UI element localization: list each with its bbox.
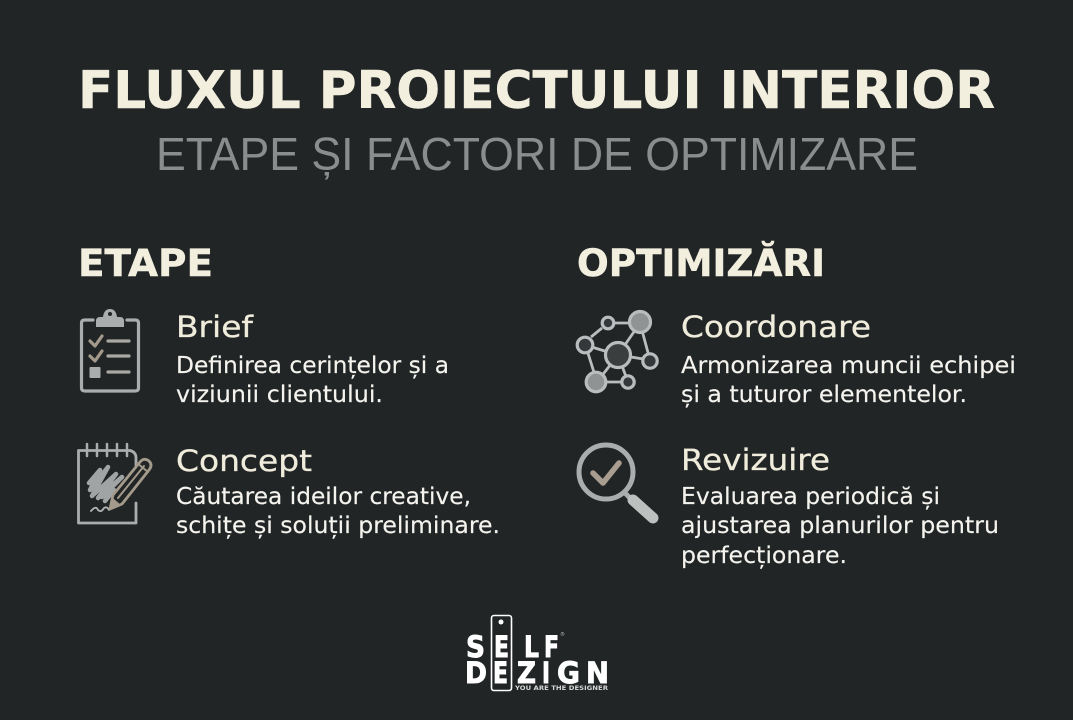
panel: optimizari [577, 241, 1016, 569]
logo: self dezign: E [493, 656, 508, 690]
text: brief description: Definirea cerințelor și a [176, 353, 449, 379]
logo: self dezign: I [542, 656, 550, 690]
logo: self dezign: Z [517, 656, 536, 690]
logo: self dezign: N [586, 656, 609, 690]
logo: self dezign: S [466, 630, 485, 664]
text: revizuire description: Evaluarea periodică și [681, 484, 940, 510]
icon: clipboard checklist [82, 309, 138, 391]
logo: self dezign [465, 616, 609, 692]
title: FLUXUL PROIECTULUI INTERIOR [78, 61, 995, 121]
text: coordonare description [681, 353, 1016, 408]
text: revizuire description: ajustarea planurilor pentru [681, 513, 999, 539]
logo: self dezign: E [494, 630, 509, 664]
panel: etape [78, 242, 500, 539]
logo: self dezign: ® [560, 631, 565, 638]
text: coordonare description: și a tuturor elementelor. [681, 382, 967, 408]
subtitle: ETAPE ȘI FACTORI DE OPTIMIZARE [156, 128, 918, 180]
heading: brief: Brief [176, 310, 254, 344]
text: revizuire description: perfecționare. [681, 543, 847, 569]
logo: self dezign: L [524, 630, 539, 664]
icon: network [577, 312, 657, 392]
text: brief description [176, 353, 449, 408]
text: concept description [176, 484, 500, 539]
logo: self dezign: YOU ARE THE DESIGNER [514, 684, 608, 692]
text: revizuire description [681, 484, 999, 569]
text: concept description: Căutarea ideilor creative, [176, 484, 471, 510]
icon: magnifier with check [579, 445, 653, 518]
heading: etape: ETAPE [78, 242, 213, 285]
icon: notepad and pencil [78, 444, 151, 523]
logo: self dezign: D [465, 656, 487, 690]
heading: concept: Concept [176, 444, 312, 478]
heading: revizuire: Revizuire [681, 443, 830, 477]
heading: coordonare: Coordonare [681, 310, 871, 344]
text: concept description: schițe și soluții preliminare. [176, 513, 500, 539]
logo: self dezign: G [557, 656, 580, 690]
heading: optimizari: OPTIMIZĂRI [577, 241, 825, 285]
text: brief description: viziunii clientului. [176, 382, 383, 408]
text: coordonare description: Armonizarea muncii echipei [681, 353, 1016, 379]
logo: self dezign: F [544, 630, 559, 664]
